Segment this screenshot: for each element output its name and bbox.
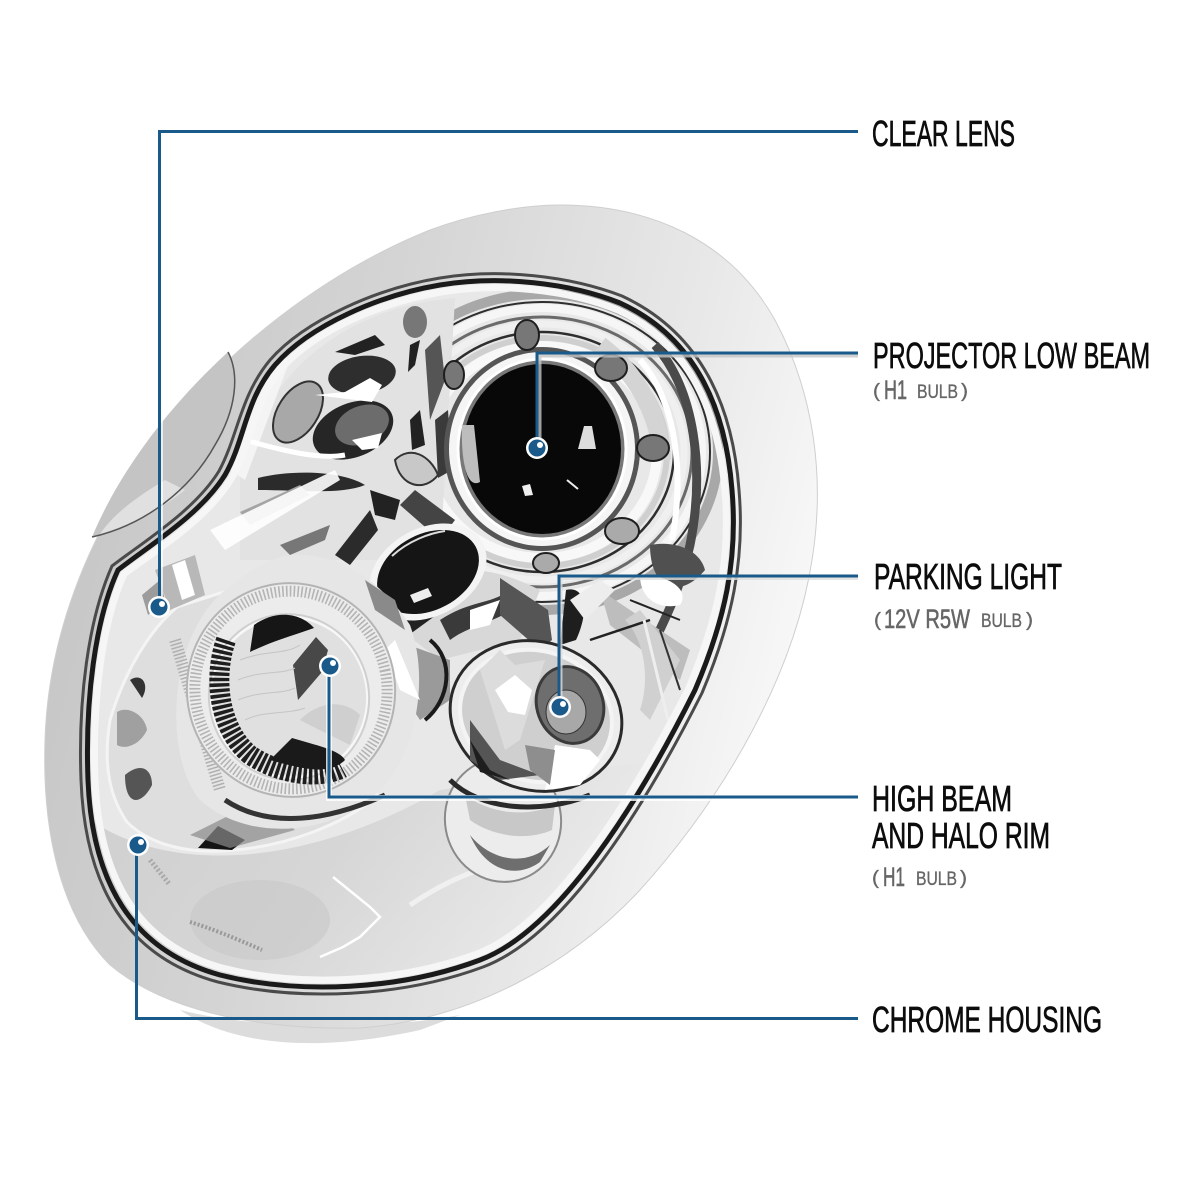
leader line: parking light: [549, 576, 858, 718]
parking light lens lower cup: [444, 764, 590, 883]
label: high beam and halo rim: [872, 778, 1050, 892]
rear housing edge: [180, 1010, 460, 1043]
headlight illustration: [45, 205, 817, 1043]
label: projector low beam: (: [873, 381, 881, 402]
parking light lens: [448, 639, 624, 793]
leader line: projector low beam: [526, 353, 858, 459]
label: parking light: [874, 556, 1062, 634]
leader line: chrome housing: [127, 834, 858, 1018]
label: high beam and halo rim: HIGH BEAM: [872, 778, 1012, 819]
label: high beam and halo rim: BULB: [916, 869, 957, 890]
lens interior: [212, 620, 366, 776]
dark right-hand chrome sweep: [650, 345, 697, 650]
concentric chrome bands around projector: [443, 290, 723, 615]
label: parking light: BULB: [981, 611, 1022, 632]
label: chrome housing: CHROME HOUSING: [872, 999, 1102, 1040]
chrome bezel: [45, 205, 817, 1028]
label: parking light: ): [1026, 610, 1033, 631]
label: projector low beam: [873, 335, 1150, 405]
high beam projector with halo rim: [167, 555, 420, 829]
central reflector clutter: [406, 571, 614, 722]
label: parking light: 12V R5W: [884, 604, 970, 634]
left reflector panel: [361, 310, 454, 544]
label: high beam and halo rim: (: [872, 868, 880, 889]
eyelid reflector: [107, 590, 377, 851]
lens rim: [80, 274, 740, 994]
label: high beam and halo rim: AND HALO RIM: [872, 815, 1050, 856]
projector low beam: [444, 320, 669, 573]
marker: [549, 696, 571, 718]
projector bolts: [444, 320, 669, 573]
label: high beam and halo rim: ): [960, 868, 967, 889]
dark oval reflector: [370, 524, 486, 620]
upper reflections: [210, 306, 455, 565]
label: projector low beam: H1: [884, 375, 907, 405]
label: projector low beam: ): [961, 381, 968, 402]
marker: [127, 834, 149, 856]
halo rim ticks: [189, 586, 393, 794]
marker: [319, 655, 341, 677]
leader line: high beam and halo rim: [319, 655, 858, 798]
lens interior: [90, 294, 722, 1000]
marker: [148, 596, 170, 618]
bezel cutout: [92, 352, 235, 537]
label: parking light: (: [874, 610, 882, 631]
lower lens swirl and crackle: [320, 877, 380, 957]
label: parking light: PARKING LIGHT: [874, 556, 1062, 597]
lens base: [87, 281, 733, 987]
leader line: clear lens: [148, 132, 858, 618]
lower lens wash: [94, 788, 464, 984]
label: projector low beam: BULB: [917, 382, 958, 403]
label: clear lens: CLEAR LENS: [872, 113, 1015, 154]
label: high beam and halo rim: H1: [883, 862, 905, 892]
clear lens corner: [142, 555, 205, 615]
marker: [526, 437, 548, 459]
right side reflections: [590, 544, 718, 720]
